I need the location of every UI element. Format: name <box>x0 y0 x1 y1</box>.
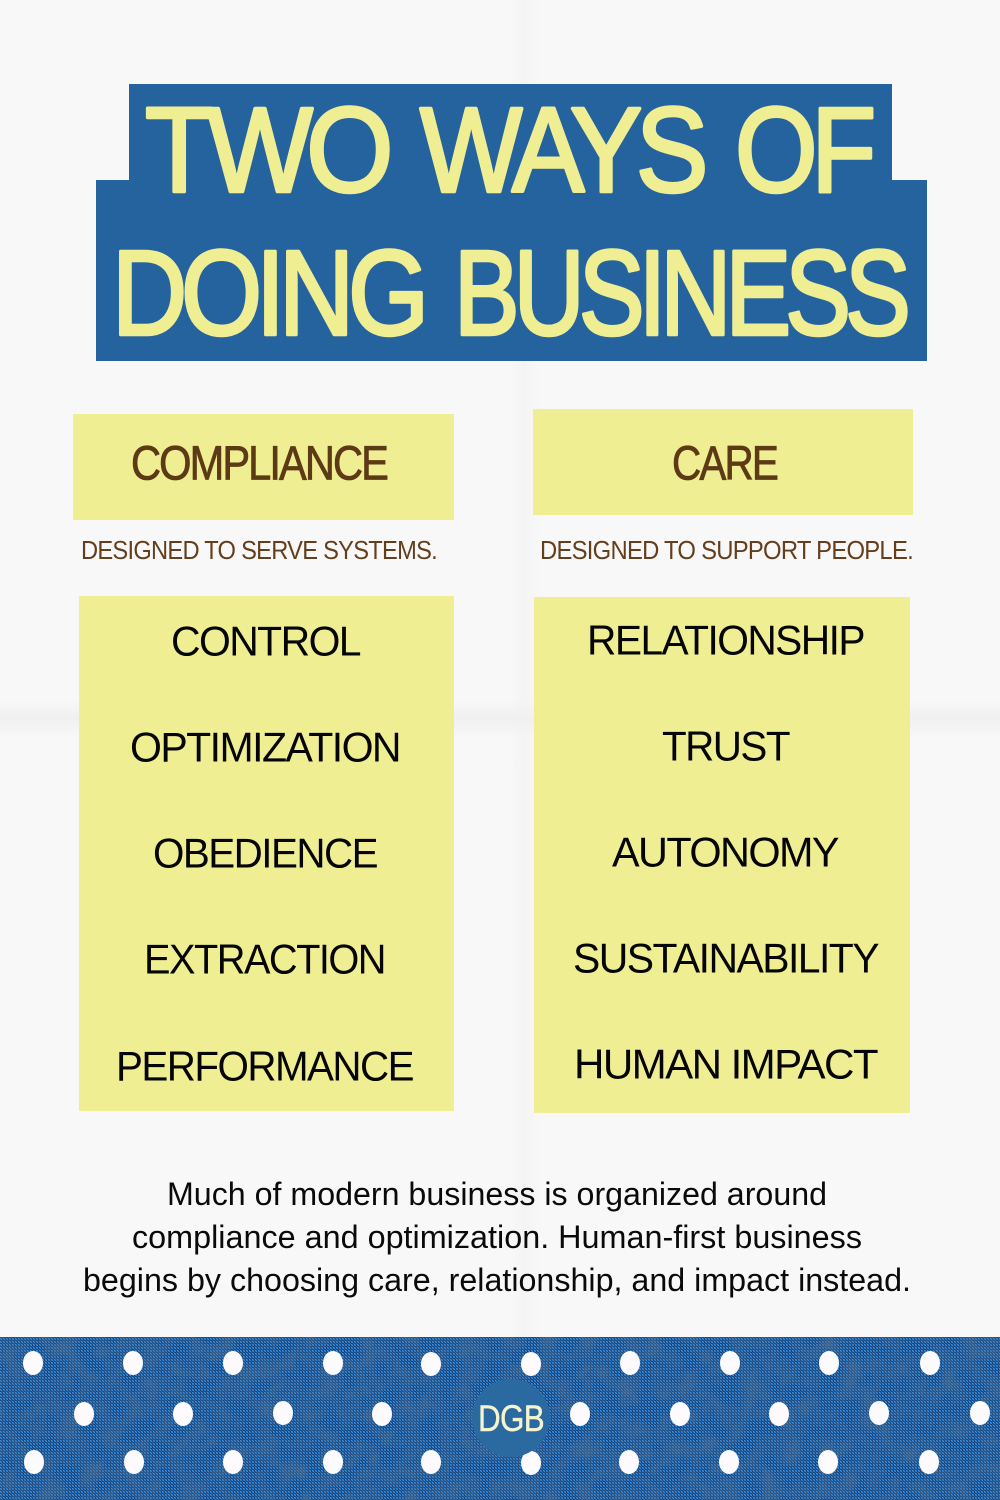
care list <box>534 597 910 1113</box>
DGB logo badge <box>472 1379 550 1457</box>
title text <box>112 82 907 360</box>
compliance heading: COMPLIANCE <box>131 438 387 490</box>
panel: compliance column <box>73 414 454 1111</box>
panel: care column <box>533 409 913 1113</box>
title text: WAYS <box>420 82 704 218</box>
compliance list: EXTRACTION <box>144 936 385 982</box>
compliance list: OPTIMIZATION <box>130 724 400 770</box>
summary paragraph: compliance and optimization. Human-first business <box>132 1219 862 1255</box>
DGB logo badge: DGB <box>478 1398 544 1439</box>
title text: OF <box>735 82 873 218</box>
summary paragraph: Much of modern business is organized around <box>167 1176 827 1212</box>
compliance list <box>79 596 454 1111</box>
polka dots <box>23 1351 990 1475</box>
title text: TWO <box>145 82 389 218</box>
care list: SUSTAINABILITY <box>573 934 880 982</box>
footer: polka dot denim strip <box>0 1337 1000 1500</box>
compliance list: PERFORMANCE <box>116 1042 414 1090</box>
compliance tagline: DESIGNED TO SERVE SYSTEMS. <box>81 535 437 565</box>
title text: DOING <box>112 224 423 360</box>
compliance list: OBEDIENCE <box>153 830 378 876</box>
care list: AUTONOMY <box>612 828 840 876</box>
care heading <box>533 409 913 515</box>
summary paragraph <box>83 1176 911 1298</box>
care list: RELATIONSHIP <box>587 616 864 664</box>
care tagline: DESIGNED TO SUPPORT PEOPLE. <box>540 535 913 565</box>
title banner <box>96 82 927 361</box>
care list: HUMAN IMPACT <box>574 1040 878 1088</box>
summary paragraph: begins by choosing care, relationship, and impact instead. <box>83 1262 911 1298</box>
care list: TRUST <box>662 722 790 770</box>
compliance heading <box>73 414 454 520</box>
title text: BUSINESS <box>454 224 907 360</box>
compliance list: CONTROL <box>171 618 360 664</box>
care heading: CARE <box>672 438 777 490</box>
